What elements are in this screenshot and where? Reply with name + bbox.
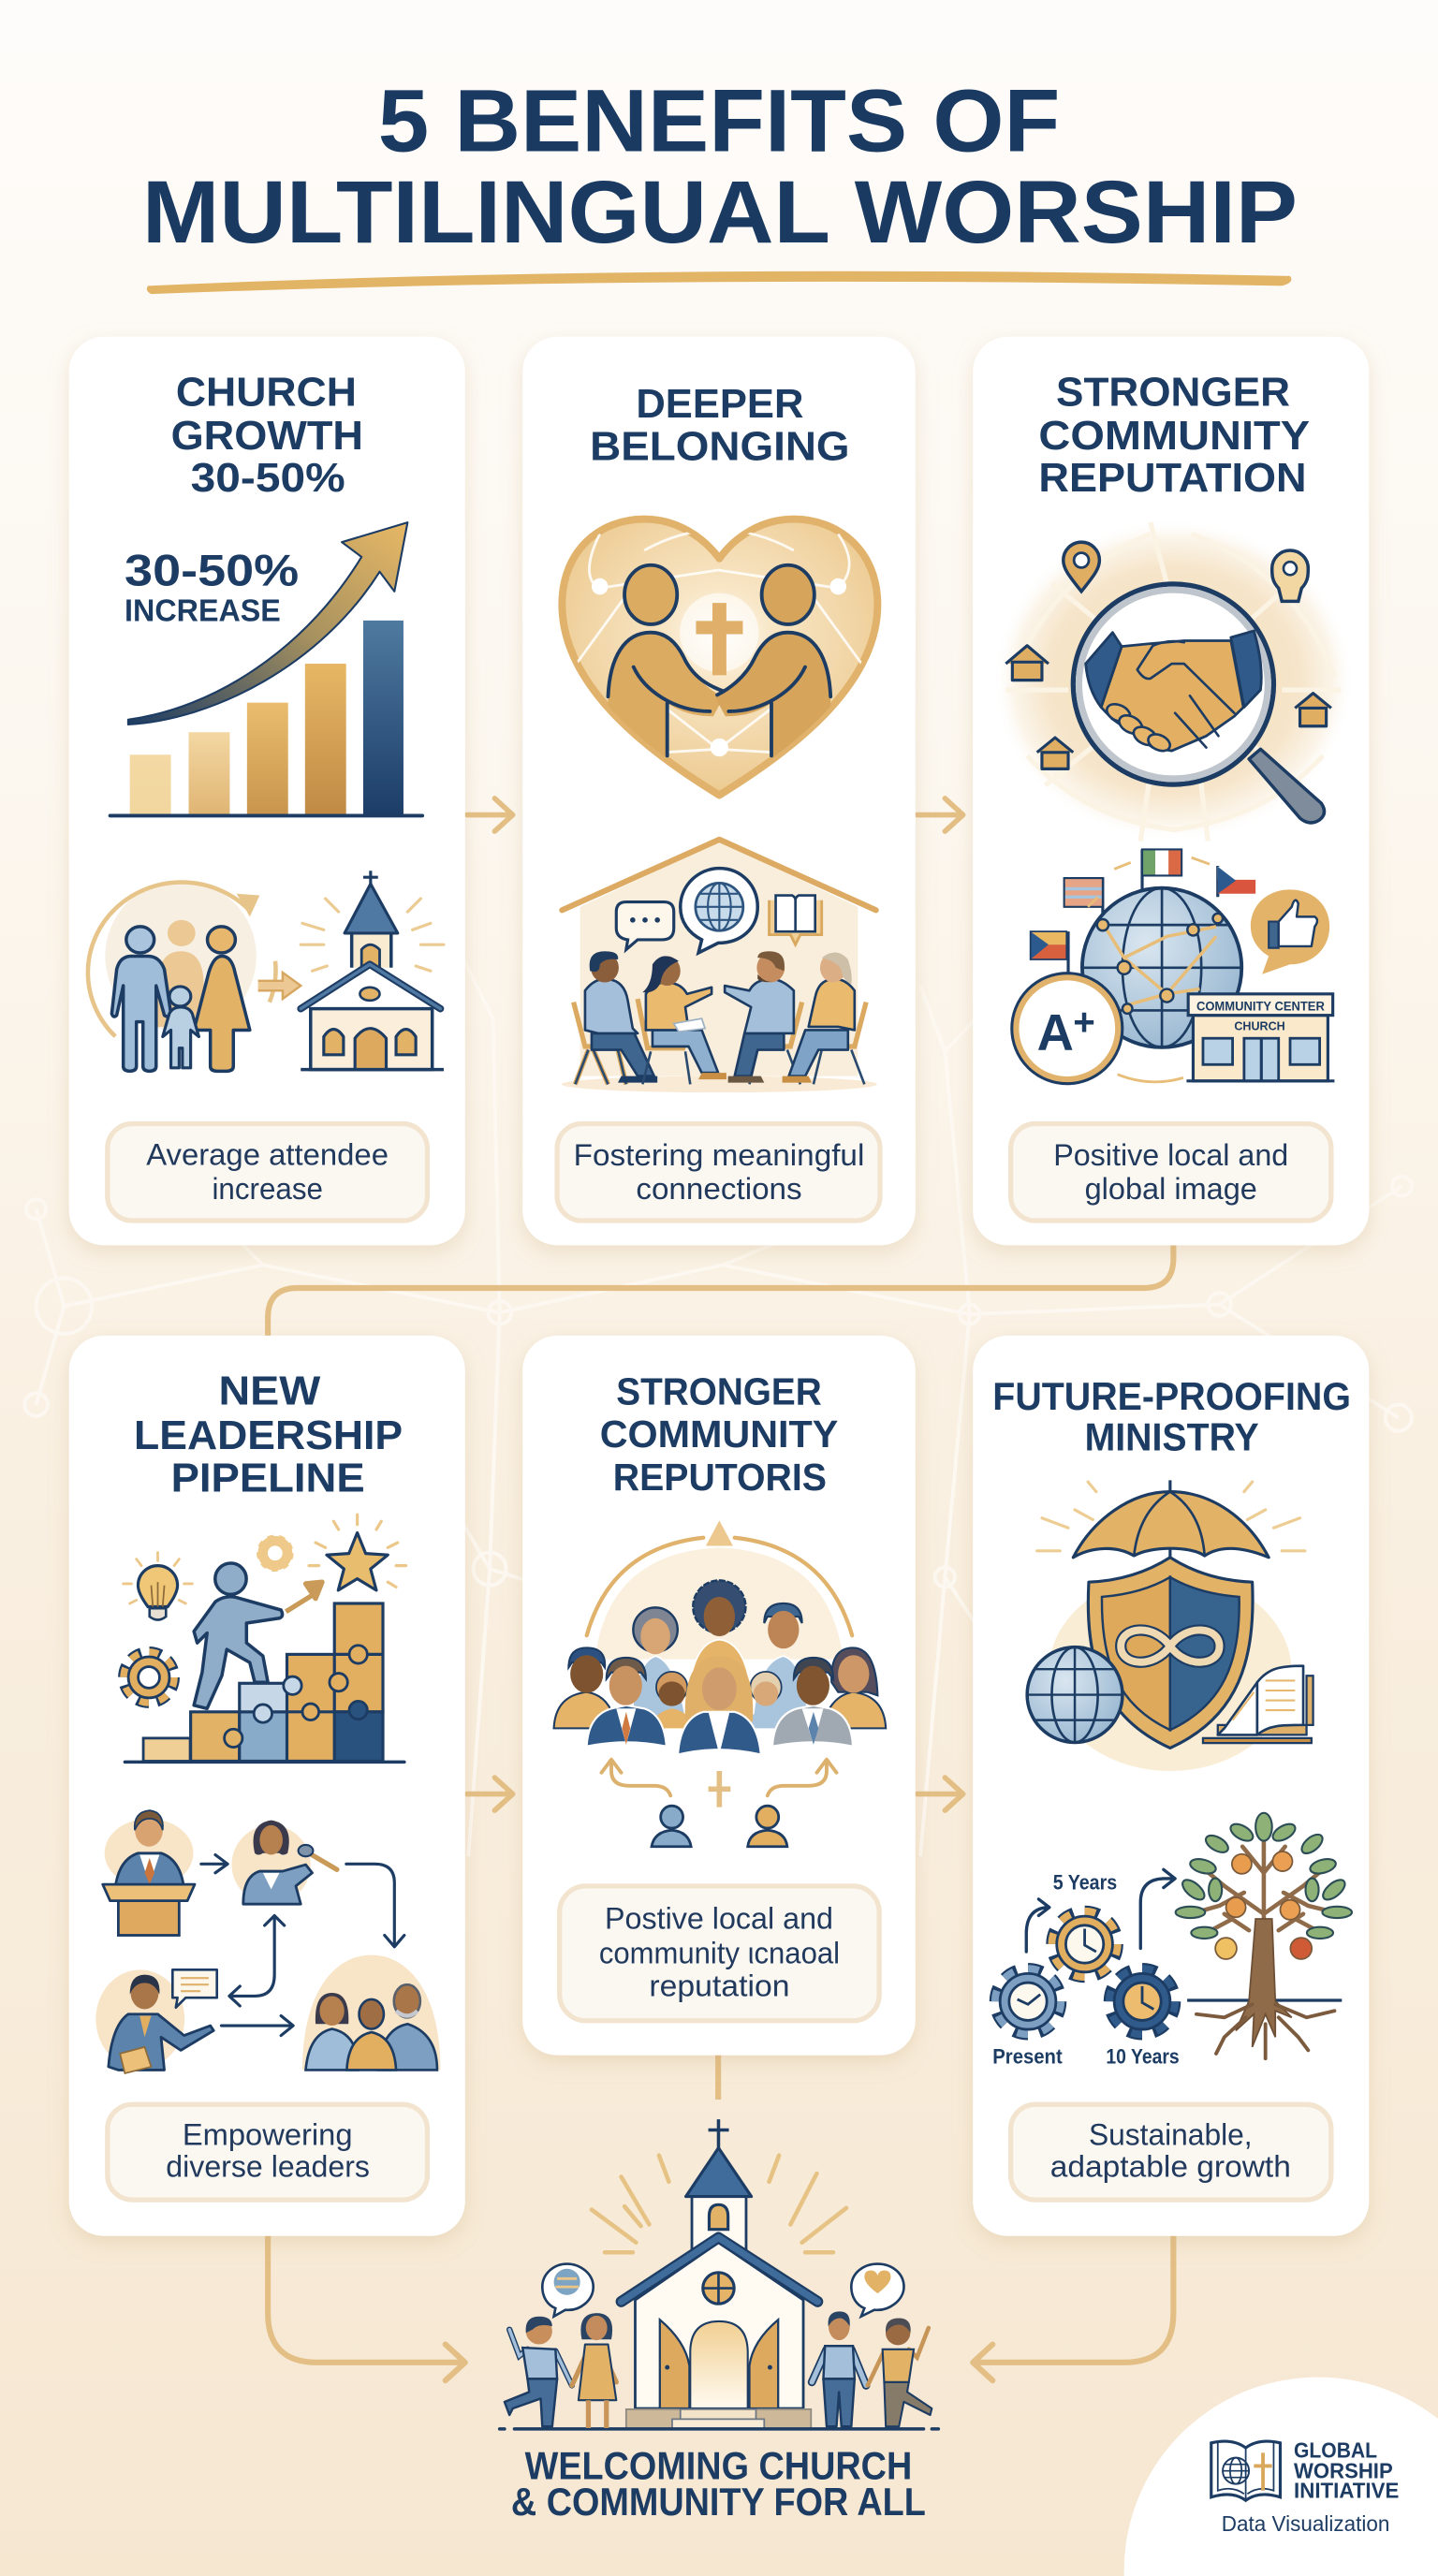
- icon: shield with umbrella globe and book: [1027, 1480, 1313, 1771]
- middle row people: [554, 1692, 616, 1728]
- caption: sustainable adaptable growth: Sustainable,: [1089, 2117, 1253, 2151]
- bar chart with rising arrow: INCREASE: [125, 593, 281, 628]
- diverse leader group: [302, 1955, 440, 2070]
- caption: positive local and global image: global image: [1085, 1172, 1257, 1206]
- illustration: welcoming church with people: [500, 2119, 938, 2429]
- people holding hands left: [505, 2313, 616, 2428]
- network pattern background: [24, 920, 1412, 1856]
- icon: family growing toward church: [88, 871, 444, 1071]
- heading: stronger community reputoris: STRONGER: [616, 1370, 822, 1413]
- heading: church growth: CHURCH: [176, 370, 357, 416]
- icon: book with globe and cross: [1211, 2441, 1280, 2500]
- title: [142, 71, 1298, 262]
- caption: postive local and community reputation: community ιcnaoal: [599, 1936, 840, 1969]
- arrow: card 4 to card 5: [467, 1778, 513, 1810]
- caption: empowering diverse leaders: Empowering: [183, 2117, 353, 2151]
- heading: stronger community reputation: REPUTATION: [1038, 455, 1307, 501]
- heading: deeper belonging: DEEPER: [636, 381, 803, 427]
- heading: deeper belonging: BELONGING: [590, 423, 850, 469]
- bar chart with rising arrow: 30-50%: [125, 547, 299, 596]
- caption: positive local and global image: Positive local and: [1053, 1138, 1288, 1172]
- icon: globe flags rating and community center: [1012, 849, 1334, 1083]
- heading: stronger community reputation: STRONGER: [1056, 370, 1290, 416]
- heading: new leadership pipeline: LEADERSHIP: [134, 1412, 403, 1458]
- bar chart with rising arrow: [110, 522, 422, 815]
- panel: new leadership pipeline: [69, 1336, 465, 2236]
- person seated 2: [638, 956, 726, 1084]
- person seated 1: [574, 951, 657, 1084]
- caption: average attendee increase: [108, 1123, 427, 1221]
- speech bubble heart: [851, 2264, 903, 2317]
- front row people: [587, 1705, 667, 1747]
- fruit tree: [1176, 1813, 1352, 2058]
- connector: row one to row two: [268, 1245, 1173, 1336]
- caption: postive local and community reputation: Postive local and: [605, 1901, 833, 1935]
- heading: future-proofing ministry: [992, 1375, 1351, 1459]
- heading: future-proofing ministry: MINISTRY: [1085, 1416, 1259, 1459]
- back row people: [631, 1640, 809, 1725]
- heading: church growth: [171, 370, 363, 501]
- caption: average attendee increase: Average attendee: [146, 1137, 389, 1171]
- icon: globe flags rating and community center: CHURCH: [1234, 1018, 1285, 1032]
- icon: time gears to fruit tree: [992, 1813, 1352, 2068]
- small people and arrows: [601, 1760, 670, 1795]
- heading: stronger community reputoris: REPUTORIS: [613, 1456, 827, 1499]
- heading: church growth: GROWTH: [171, 413, 363, 459]
- connector: centre card to church: [716, 2056, 720, 2100]
- caption: sustainable adaptable growth: [1011, 2104, 1331, 2200]
- icon: handshake in magnifier over map: [992, 520, 1354, 842]
- icon: leadership cycle flow: [95, 1810, 440, 2073]
- heading: new leadership pipeline: [134, 1368, 403, 1501]
- heading: church growth: 30-50%: [191, 455, 345, 501]
- icon: time gears to fruit tree: Present: [992, 2044, 1063, 2068]
- badge: global worship initiative logo: GLOBAL: [1294, 2438, 1377, 2463]
- caption: empowering diverse leaders: diverse leaders: [166, 2150, 370, 2184]
- connector: right card to church: [973, 2236, 1173, 2380]
- title: 5 BENEFITS OF: [378, 71, 1060, 170]
- people holding hands right: [812, 2311, 932, 2426]
- heading: stronger community reputation: [1038, 370, 1310, 501]
- caption: postive local and community reputation: [560, 1886, 879, 2021]
- badge: global worship initiative logo: Data Visualization: [1222, 2511, 1389, 2536]
- heading: welcoming church and community: & COMMUNITY FOR ALL: [511, 2480, 926, 2524]
- woman with microphone: [232, 1821, 337, 1904]
- speech bubble globe: [542, 2264, 594, 2317]
- icon: time gears to fruit tree: 10 Years: [1106, 2044, 1180, 2068]
- icon: globe flags rating and community center: COMMUNITY CENTER: [1196, 998, 1325, 1013]
- caption: fostering meaningful connections: Fostering meaningful: [574, 1138, 864, 1172]
- caption: postive local and community reputation: reputation: [649, 1969, 789, 2002]
- icon: globe flags rating and community center: +: [1073, 1001, 1095, 1044]
- title underline brush stroke: [147, 271, 1291, 294]
- church building: [622, 2119, 817, 2429]
- heading: new leadership pipeline: NEW: [218, 1368, 321, 1414]
- panel: church growth: [69, 337, 465, 1245]
- speaker at podium: [103, 1810, 195, 1936]
- title: MULTILINGUAL WORSHIP: [142, 163, 1298, 262]
- gear: present: [996, 1969, 1060, 2033]
- caption: sustainable adaptable growth: adaptable growth: [1050, 2150, 1291, 2184]
- panel: deeper belonging: [522, 337, 916, 1245]
- arrow: card 2 to card 3: [917, 798, 963, 831]
- heading: stronger community reputoris: COMMUNITY: [600, 1412, 838, 1456]
- heading: deeper belonging: [590, 381, 850, 469]
- badge: global worship initiative logo: INITIATIVE: [1294, 2478, 1399, 2502]
- heading: welcoming church and community: WELCOMING CHURCH: [525, 2443, 912, 2487]
- gear: ten years: [1110, 1969, 1174, 2033]
- icon: climbing puzzle steps toward star: [124, 1515, 406, 1762]
- arrow: card 5 to card 6: [917, 1778, 963, 1810]
- icon: heart with two people and cross: [562, 520, 877, 795]
- church rays: [592, 2156, 846, 2252]
- gear: five years: [1052, 1912, 1117, 1976]
- panel: future-proofing ministry: [973, 1336, 1369, 2236]
- panel: stronger community reputoris: [522, 1336, 916, 2056]
- heading: future-proofing ministry: FUTURE-PROOFING: [992, 1375, 1351, 1418]
- person seated 3: [725, 951, 802, 1084]
- presenter with speech bubble: [95, 1969, 217, 2073]
- caption: fostering meaningful connections: [557, 1123, 880, 1221]
- caption: average attendee increase: increase: [212, 1172, 323, 1206]
- heading: welcoming church and community: [511, 2443, 926, 2524]
- icon: diverse congregation under arc: [554, 1520, 886, 1847]
- caption: fostering meaningful connections: connections: [636, 1172, 802, 1206]
- connector: left card to church: [268, 2236, 465, 2380]
- icon: group conversation under roof: [562, 840, 877, 1092]
- icon: globe flags rating and community center: A: [1037, 1004, 1074, 1061]
- caption: empowering diverse leaders: [108, 2104, 427, 2200]
- caption: positive local and global image: [1011, 1123, 1331, 1221]
- badge: global worship initiative logo: [1124, 2378, 1438, 2576]
- heading: new leadership pipeline: PIPELINE: [171, 1456, 365, 1501]
- arrow: card 1 to card 2: [467, 798, 513, 831]
- heading: stronger community reputoris: [600, 1370, 838, 1499]
- panel: stronger community reputation: [973, 337, 1369, 1245]
- badge: global worship initiative logo: WORSHIP: [1294, 2459, 1393, 2483]
- person seated 4: [783, 952, 866, 1084]
- icon: time gears to fruit tree: 5 Years: [1053, 1870, 1117, 1894]
- heading: stronger community reputation: COMMUNITY: [1038, 413, 1310, 459]
